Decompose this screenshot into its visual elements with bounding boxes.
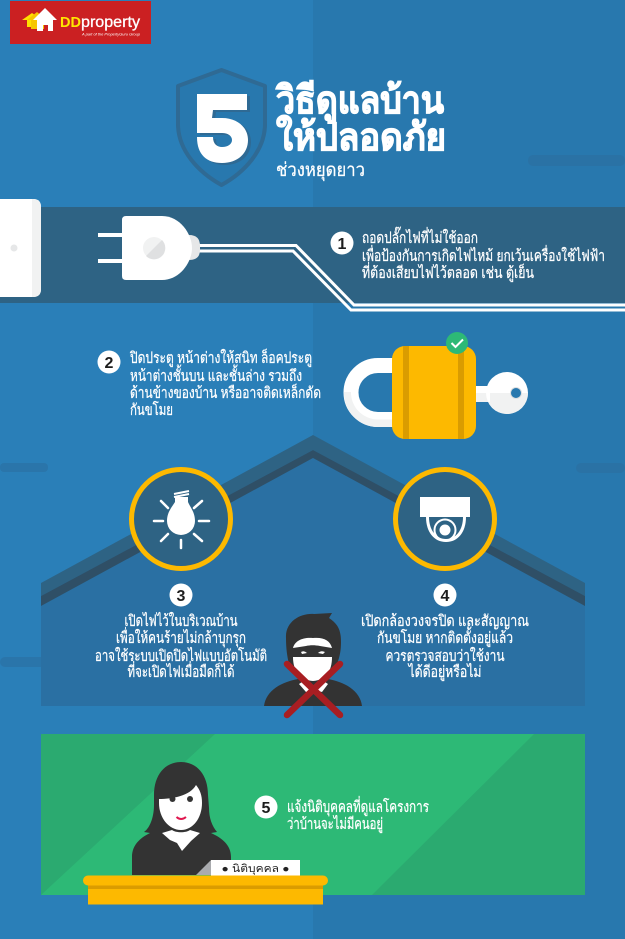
text: step 2: กันขโมย	[130, 401, 173, 419]
title: ให้ปลอดภัย	[276, 115, 446, 159]
logo: DDproperty	[10, 1, 151, 44]
icon: plug	[98, 216, 200, 280]
text: step 4: เปิดกล้องวงจรปิด และสัญญาณ	[361, 613, 529, 630]
icon: woman receptionist at desk: ● นิติบุคคล ●	[222, 863, 290, 875]
text: step 3: 3	[177, 588, 186, 605]
text: step 3: อาจใช้ระบบเปิดปิดไฟแบบอัตโนมัติ	[95, 647, 267, 665]
panel: house body	[41, 458, 585, 706]
panel: step 5 green	[41, 734, 585, 895]
text: step 4: ควรตรวจสอบว่าใช้งาน	[386, 647, 505, 665]
text: step 3: เปิดไฟไว้ในบริเวณบ้าน	[124, 612, 238, 630]
text: step 1: 1	[338, 236, 347, 253]
icon: wall socket	[0, 199, 41, 297]
text: step 3: ที่จะเปิดไฟเมื่อมืดก็ได้	[128, 661, 234, 681]
text: step 1: ถอดปลั๊กไฟที่ไม่ใช้ออก	[362, 226, 478, 247]
icon: woman receptionist at desk	[83, 762, 328, 904]
panel: step 1 band	[0, 207, 625, 303]
text: step 4: ได้ดีอยู่หรือไม่	[407, 663, 482, 682]
text: step 2: 2	[105, 355, 114, 372]
text: step 4	[361, 584, 529, 682]
logo: DDproperty: A part of the PropertyGuru Group	[81, 32, 140, 36]
text: step 2: ปิดประตู หน้าต่างให้สนิท ล็อคประตู	[129, 348, 312, 368]
text: step 3: เพื่อให้คนร้ายไม่กล้าบุกรุก	[116, 627, 246, 648]
text: step 5: แจ้งนิติบุคคลที่ดูแลโครงการ	[287, 796, 429, 817]
logo: DDproperty: property	[81, 14, 140, 31]
icon: masked thief crossed out	[264, 613, 362, 715]
icon: shield with number 5	[178, 70, 265, 185]
text: step 1: ที่ต้องเสียบไฟไว้ตลอด เช่น ตู้เย็น	[362, 262, 534, 283]
logo: DDproperty: DD	[60, 14, 81, 31]
text: step 1	[330, 226, 605, 283]
text: step 4: 4	[441, 588, 450, 605]
icon: padlock and key	[344, 332, 528, 439]
text: step 5: 5	[262, 800, 271, 817]
text: step 5	[254, 796, 429, 834]
text: step 2	[98, 348, 321, 419]
roof	[41, 435, 585, 606]
text: step 4: กันขโมย หากติดตั้งอยู่แล้ว	[377, 626, 513, 648]
icon: light bulb	[132, 470, 230, 568]
icon: power cord	[198, 246, 625, 310]
title: วิธีดูแลบ้าน	[275, 80, 444, 124]
icon: security camera	[396, 470, 494, 568]
text: step 3	[95, 584, 267, 681]
text: step 2: ด้านข้างของบ้าน หรืออาจติดเหล็กดัด	[130, 383, 321, 402]
title	[275, 80, 446, 182]
text: step 5: ว่าบ้านจะไม่มีคนอยู่	[287, 815, 383, 834]
text: step 2: หน้าต่างชั้นบน และชั้นล่าง รวมถึง	[130, 364, 302, 385]
title: ช่วงหยุดยาว	[276, 160, 365, 182]
